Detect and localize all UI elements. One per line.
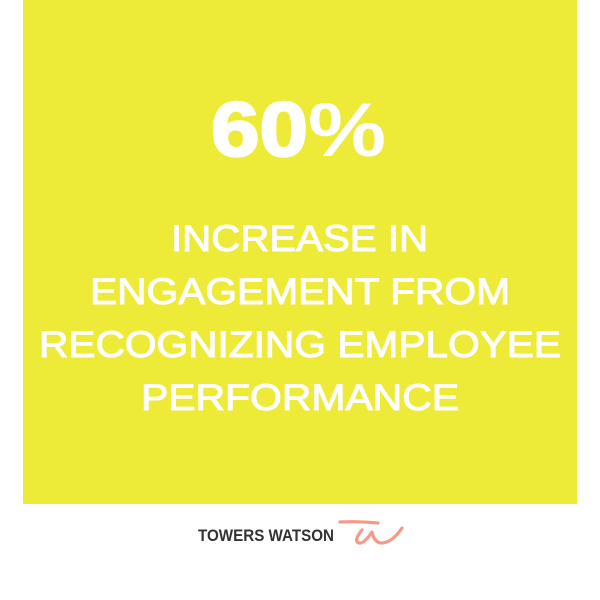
headline statistic: %	[308, 88, 386, 173]
headline statistic	[211, 87, 386, 173]
description text block: INCREASE IN	[171, 218, 428, 259]
panel: yellow background	[23, 0, 577, 504]
description text block: PERFORMANCE	[141, 377, 459, 418]
logo wordmark: TOWERS WATSON	[198, 527, 334, 545]
description text block	[39, 218, 561, 418]
description text block: RECOGNIZING EMPLOYEE	[39, 324, 561, 365]
headline statistic: 60	[211, 87, 308, 173]
description text block: ENGAGEMENT FROM	[90, 271, 510, 312]
logo: Towers Watson	[198, 522, 402, 545]
logo swoosh	[340, 522, 402, 543]
